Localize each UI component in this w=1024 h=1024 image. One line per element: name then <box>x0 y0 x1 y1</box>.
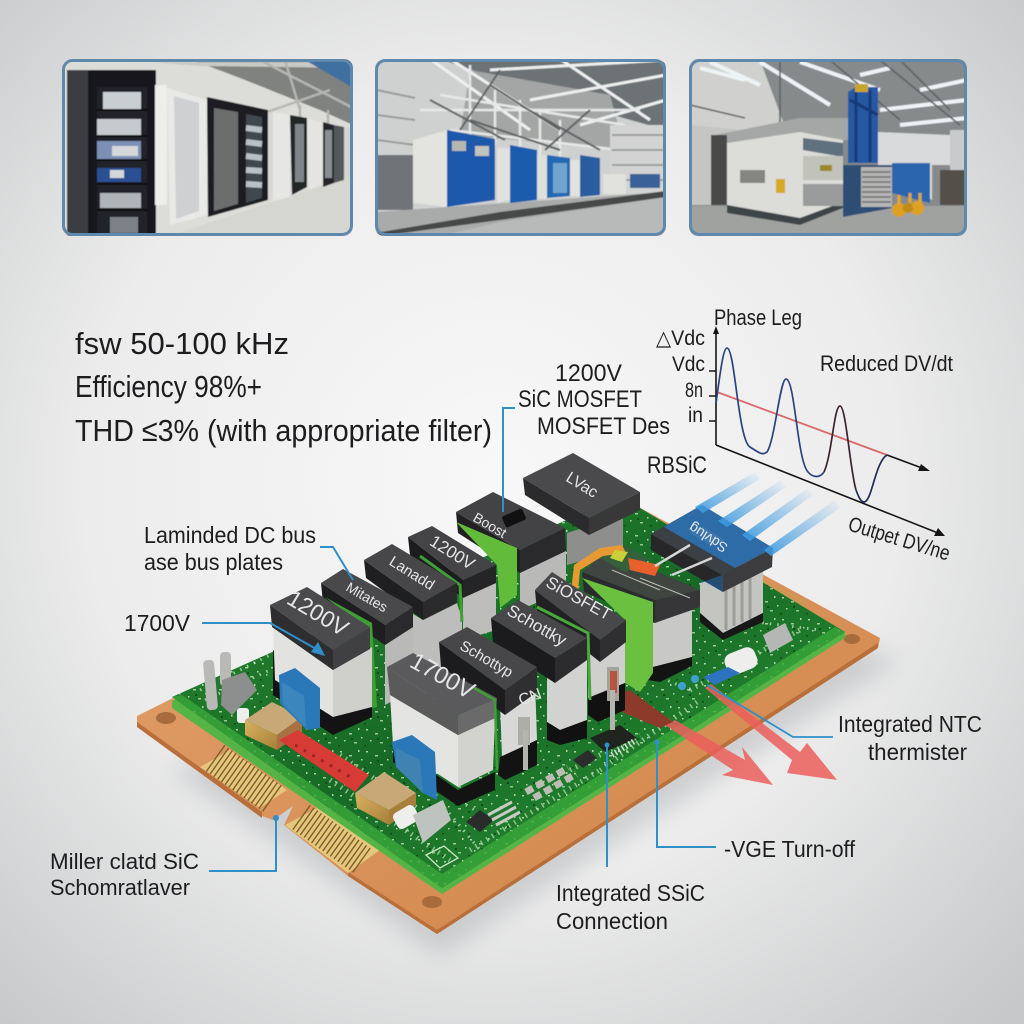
waveform chart: Outpet DV/ne <box>846 513 953 565</box>
module: SiC FET <box>535 572 626 722</box>
white connector front <box>391 800 451 843</box>
specification text block <box>75 326 492 448</box>
red bus bar <box>279 730 369 792</box>
waveform chart <box>656 305 953 565</box>
board shadow <box>170 600 900 955</box>
waveform chart: Phase Leg <box>714 305 802 330</box>
module: LVac <box>523 453 640 565</box>
module: Schottyp: CN <box>516 686 544 709</box>
label: SiC MOSFET <box>518 360 670 440</box>
front chips <box>466 725 637 832</box>
copper base plate <box>137 505 880 934</box>
module: Schottky <box>491 600 619 745</box>
callout: 1700V: 1700V <box>124 610 191 636</box>
module: Lanadd <box>364 544 462 700</box>
gold capacitor right <box>355 772 416 825</box>
callout: laminated DC bus: ase bus plates <box>144 549 283 575</box>
module: blue tagged <box>651 505 773 640</box>
module: LVac: LVac <box>563 469 601 502</box>
brown resistor strip <box>620 690 673 728</box>
module: 1200V rear: 1200V <box>426 531 479 574</box>
label: SiC MOSFET: 1200V <box>555 360 622 387</box>
photo panel: cabinet row <box>62 59 353 236</box>
connector fingers left <box>200 750 287 808</box>
callout: integrated SSiC connection: Connection <box>556 908 668 934</box>
connector fingers back <box>763 585 807 607</box>
specification text block: THD ≤3% (with appropriate filter) <box>75 413 492 448</box>
gold capacitor left <box>245 702 302 750</box>
module: Schottky: Schottky <box>504 601 570 650</box>
callout: integrated SSiC connection: Integrated SSiC <box>556 880 705 906</box>
module: Schottyp: Schottyp <box>457 637 516 681</box>
callout line: SiC MOSFET <box>503 408 515 512</box>
module: centre board stack <box>571 545 712 692</box>
blue capacitor left <box>279 668 320 730</box>
orange strap <box>571 545 626 592</box>
callout: integrated NTC thermister: Integrated NTC <box>838 711 982 737</box>
callout: VGE turn-off <box>654 740 856 862</box>
waveform chart: in <box>688 404 703 427</box>
blue capacitor on module <box>279 668 320 730</box>
red heat arrows under board <box>665 684 837 785</box>
callout: integrated NTC thermister <box>707 685 982 765</box>
module: 1700V front: 1700V <box>405 648 479 705</box>
label: SiC MOSFET: SiC MOSFET <box>518 386 642 413</box>
module: SiC FET: SiOSFET <box>543 573 615 624</box>
photo panel: blue switchgear hall <box>375 59 666 236</box>
label: SiC MOSFET: MOSFET Des <box>537 413 670 440</box>
board assembly <box>137 408 900 955</box>
pin and sensor <box>607 667 619 701</box>
waveform chart: Vdc <box>672 353 705 376</box>
waveform chart: Reduced DV/dt <box>820 351 953 376</box>
left pins and connector <box>203 652 257 723</box>
green strip <box>582 578 653 692</box>
callout: Miller clamp <box>50 815 279 900</box>
callout: Miller clamp: Miller clatd SiC <box>50 849 199 874</box>
module: 1700V front <box>387 648 497 806</box>
module: Mitates: Mitates <box>343 579 391 615</box>
specification text block: Efficiency 98%+ <box>75 369 262 404</box>
waveform chart: 8n <box>685 379 703 402</box>
module: blue tagged: Sdvlug <box>686 520 730 556</box>
module: 1200V front: 1200V <box>283 585 354 642</box>
right side components <box>678 623 793 690</box>
module: Lanadd: Lanadd <box>386 553 437 594</box>
callout: Miller clamp: Schomratlaver <box>50 875 190 900</box>
green strip <box>456 522 517 608</box>
callout: integrated NTC thermister: thermister <box>868 739 967 765</box>
module: 1200V rear <box>408 526 496 640</box>
specification text block: fsw 50-100 kHz <box>75 326 289 361</box>
photo panel: machinery hall <box>689 59 967 236</box>
callout: 1700V <box>124 610 325 656</box>
module: Schottyp <box>439 627 544 780</box>
waveform chart: △Vdc <box>656 327 705 350</box>
module: Boost with chip <box>456 492 566 610</box>
module: Boost with chip: Boost <box>470 509 510 541</box>
green circuit board <box>172 496 845 894</box>
connector fingers right <box>285 808 380 873</box>
callout: laminated DC bus: Laminded DC bus <box>144 522 316 548</box>
blue rays <box>695 472 840 556</box>
callout: laminated DC bus <box>144 522 353 580</box>
module: Mitates <box>321 569 413 708</box>
blue capacitor front <box>392 735 437 800</box>
module: 1200V front <box>270 585 372 735</box>
label: RBSiC: RBSiC <box>647 452 707 479</box>
callout: integrated SSiC connection <box>556 742 705 934</box>
callout: VGE turn-off: -VGE Turn-off <box>724 836 856 862</box>
